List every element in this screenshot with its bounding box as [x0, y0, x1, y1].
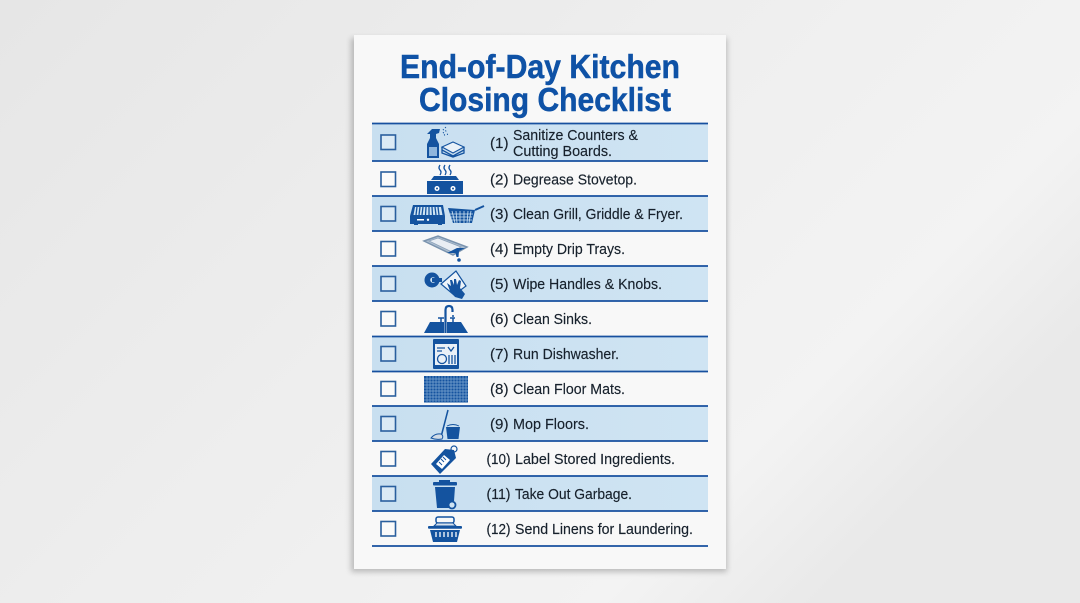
task list text: Empty Drip Trays.: [513, 242, 625, 258]
icon: mop and bucket: [431, 410, 460, 439]
icon: griddle and fryer basket: [410, 205, 484, 225]
task list text: [486, 128, 693, 538]
title: Closing Checklist: [419, 81, 671, 118]
checkbox column: [381, 135, 396, 536]
task list text: (2): [490, 172, 508, 188]
task list text: Take Out Garbage.: [515, 487, 632, 503]
task list text: Wipe Handles & Knobs.: [513, 277, 662, 293]
task list text: Clean Sinks.: [513, 312, 592, 328]
task list text: Send Linens for Laundering.: [515, 522, 693, 538]
task list text: (10): [486, 452, 510, 468]
task list text: Degrease Stovetop.: [513, 172, 637, 188]
icon: label tag: [431, 446, 457, 474]
title: [400, 48, 680, 118]
task list text: Label Stored Ingredients.: [515, 452, 675, 468]
task list text: (7): [490, 347, 508, 363]
task list text: (1): [490, 136, 508, 152]
task list text: (3): [490, 207, 508, 223]
task list text: (12): [486, 522, 510, 538]
poster panel: [354, 35, 726, 569]
icon: dishwasher: [433, 339, 459, 369]
task list text: Cutting Boards.: [513, 144, 612, 160]
icon: stovetop with steam: [427, 165, 463, 194]
icon: laundry basket: [428, 517, 462, 542]
icon: kitchen sink with faucet: [424, 306, 468, 333]
task list text: Run Dishwasher.: [513, 347, 619, 363]
task list text: Mop Floors.: [513, 417, 589, 433]
task list text: (6): [490, 312, 508, 328]
poster shadow: [351, 38, 727, 572]
icon: handle and cloth with gloved hand: [424, 271, 466, 299]
icon: spray bottle and cloth: [427, 127, 464, 158]
task list text: Clean Grill, Griddle & Fryer.: [513, 207, 683, 223]
task list text: (9): [490, 417, 508, 433]
task list text: (4): [490, 242, 508, 258]
icon: garbage bin: [433, 480, 457, 508]
task list text: Clean Floor Mats.: [513, 382, 625, 398]
icon: drip tray: [424, 236, 467, 262]
task list text: (11): [486, 487, 510, 503]
task list text: (5): [490, 277, 508, 293]
title: End-of-Day Kitchen: [400, 48, 680, 85]
task list text: Sanitize Counters &: [513, 128, 638, 144]
icon: floor mat: [424, 376, 468, 403]
shaded row bands: [372, 124, 708, 511]
task list text: (8): [490, 382, 508, 398]
